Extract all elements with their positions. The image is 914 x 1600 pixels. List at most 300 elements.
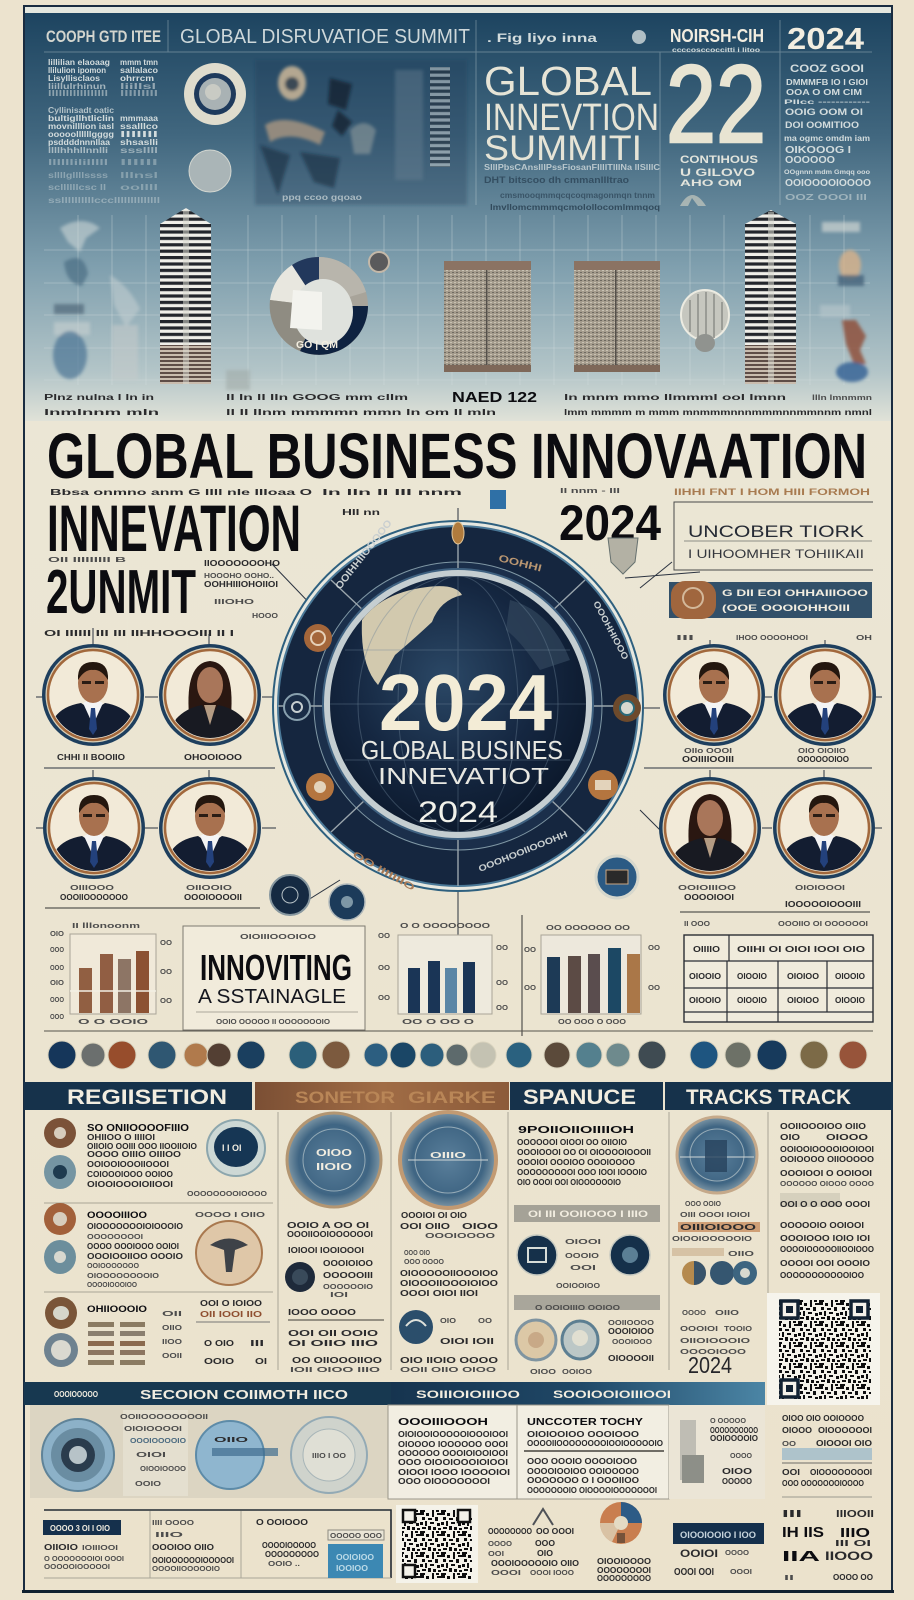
left text columns in banner: psddddnnnllaa [48,138,111,147]
section bar: sponsor: GIARKE [408,1088,496,1107]
bar chart 3: OO OOO O OOO [558,1019,627,1026]
speaker name labels row 2: OOOOIOOI [684,893,734,902]
icon: session disc 2 [400,1112,496,1208]
collage image [255,60,467,205]
globe emblem [273,518,643,893]
icon: pale orb [189,150,231,192]
text: tracks center: OIII OOOI IOIOI [680,1212,750,1219]
speaker name labels row 2: OIOIOOOI [795,885,845,892]
box: blue tile [328,1544,383,1578]
bar chart 3: OO OOOOOO OO [546,925,631,932]
text: ticket text: O OOIOOO [256,1518,308,1527]
text block: bottom mid: OOOOOOOO [488,1527,532,1536]
strip of small text under grid [44,389,872,417]
panel: far right text column: OOOIOOI O OOIOOI [780,1169,872,1178]
icon: dial bronze right bottom [588,770,618,800]
icon: dial right [613,694,641,722]
text: session column 1: OOOIIOOIOOOOOOI [287,1230,373,1239]
text: registration block 2: OIOOOOOOOOIO [87,1273,160,1280]
strip of small text under grid: ll ll llnm mmmmn mmn ln om ll mln [226,408,496,417]
bar chart 1: OO [160,998,173,1005]
sphere [322,568,594,840]
icon: registration teal 1 [44,1155,76,1189]
text block: logo caption [597,1557,651,1583]
portrait: speaker 7 [659,777,761,879]
section bar: sponsor spanuce: SPANUCE [523,1086,636,1109]
panel: agenda white card 2: OOOOOOOIO OIOOOOIOOOOOOOI [527,1486,657,1495]
small text above right portraits: OH [856,635,872,642]
subtitle innovation: INNEVATION [47,491,301,565]
icon: dial bronze left bottom [306,773,334,801]
text block: bottom right: IIIO [840,1525,870,1540]
small text under title: IIHHI FNT I HOM HIII FORMOH [674,487,870,497]
icon: registration brown 1 [44,1118,76,1148]
panel: agenda white card 2: UNCCOTER TOCHY [527,1417,643,1428]
strip of small text under grid: ll ln ll lln GOOG mm cllm [226,393,408,402]
speaker name labels row 1: OOIIIIOOIII [682,755,734,764]
right text column in banner: DMMMFB lO I GIOI [786,78,868,87]
left text columns in banner: llllllililllll [48,158,108,167]
bar chart 1: OO [160,940,173,947]
text: registration block 2: OOOIOOIIOO OOOIO [87,1252,183,1261]
panel: agenda white card 1: OOO OIOOOOOOOI [398,1477,490,1486]
icon: tracks small 3 [733,1261,757,1285]
panel: session discs [30,1405,388,1498]
speaker name labels row 2: IOOOOOIOOOIII [785,900,861,909]
icon: session small blue [399,1310,433,1344]
bar chart 2: OO [496,945,509,952]
icon: session disc large [42,1419,114,1491]
panel: agenda white card 1: OIOOI IOOO IOOOOIOI [398,1468,510,1477]
icon: bronze medallion [196,1221,262,1285]
panel: far right text column: OOOOIOOOOOIIOOIOOO [780,1245,874,1254]
outer dial ring: OOOHOOIIOOOHH [477,829,569,874]
text: ticket text: OOOIOO OIIO [152,1543,214,1552]
bar chart 1: OOO [50,1014,64,1021]
text: registration block 1: SO ONIIOOOOFIIIO [87,1123,189,1134]
text: session column 2: OOII OIIO OIOO [400,1367,497,1374]
panel: far right text column: OOOOOO OIOOO OOOO [780,1181,875,1188]
callout: innoviting: OIOIIIOOOIOO [240,934,317,941]
left text columns in banner: llllhhhllnnlli [48,146,108,155]
text: registration block 1: OOOOOOOOIOOOO [187,1191,268,1198]
text block: right agenda: OIOOOOOOI [818,1426,872,1435]
text: sponsor right [530,1320,655,1376]
section bar: sponsor spanuce [510,1082,663,1110]
panel: agenda white card 2: OOO OOOIO OOOOIOOO [527,1457,637,1466]
callout: innoviting: INNOVITING [200,947,352,988]
table panel [684,921,873,1022]
caption under 22: U GILOVO [680,167,756,179]
text: session column 1: OOIO A OO OI [287,1221,369,1230]
bar chart 2: OO [378,933,391,940]
text block: bottom mid: OOOIOOOOOIO OIIO [491,1559,579,1568]
left text columns in banner: bultigllhtliclin [48,114,114,123]
left text columns in banner: oollll [120,183,158,192]
icon: top gold pin [452,522,464,544]
text: registration block 1: COIOOOIOOO OOIOO [87,1170,173,1179]
section bar: session schedule: OOOIOOOOO [54,1390,98,1399]
text block: bottom mid: OO OOOI [536,1527,574,1536]
globe text: 2024 small: 2024 [418,796,498,829]
text: sponsor paragraph: OOOOOOOOOI OOO IOOI IOOOIO [517,1168,647,1177]
bottom frame rule [22,1590,894,1593]
outer dial ring: OOHHI [497,553,543,575]
text: ticket text: OOOOO OOO [330,1533,383,1540]
table panel right [574,261,660,372]
section bar: session schedule: SECOION COIIMOTH IICO [140,1387,348,1402]
text: sponsor paragraph: OIO OOOI OOI OIOOOOOOIO [517,1178,621,1187]
icon: dark node 2 [329,884,365,920]
text and table: registration block 3: OOI O IOIOO [200,1299,262,1308]
text: registration block 2: OOOO I OIIO [195,1212,266,1219]
text: session column 2: OOOI OIOI IIOI [400,1289,478,1298]
text block: under navy box: OOIOI [680,1548,718,1560]
portrait: speaker 2 [159,644,261,746]
bar chart 2: O O OOOOOOOO [400,923,491,930]
panel: agenda white card 2: OOOOIOOIOO OOIOOOOO [527,1467,639,1476]
text: sponsor center [556,1239,601,1290]
small text near summit: OOHHIIIOHOIIOI [204,580,278,589]
bar chart 3: OO [648,985,661,992]
left text columns in banner: ssalllco [120,122,158,131]
text: registration block 1: OHIIOO O IIIIOI [87,1133,155,1142]
small text near summit: HOOOHO OOHO.. [204,573,274,580]
text block: bottom mid: OOOI IOOO [530,1570,575,1577]
panel: agenda white card 2: OOOOIIOOOOOOOOIOOIOOOOOIO [527,1439,663,1448]
text block: logo caption: OOOOOOOOO [597,1574,651,1583]
text block: right agenda: OIOO OIO OOIOOOO [782,1414,864,1423]
bar chart 2: OO O OO O [402,1019,475,1026]
text block: right agenda: OIOOOI OIO [816,1439,872,1448]
icon: session disc medium: OIIO [214,1437,249,1444]
icon row [48,1040,867,1070]
speaker name labels row 2 [45,885,870,912]
table panel: OIIHI OI OIOI IOOI OIO [737,945,865,954]
text: tracks bottom: OOOO [682,1310,707,1317]
text: session disc caption: OOOIOOOOIO [130,1438,187,1445]
text block: bottom mid: OOOI [491,1570,521,1577]
bar chart tower left [160,208,211,384]
left text columns in banner: scllllllcsc ll [48,183,106,192]
text block: bottom right: OOOO OO [833,1573,873,1582]
text: session column 2: OO [478,1318,493,1325]
small text above right portraits [676,635,872,642]
portrait: speaker 5 [43,777,145,879]
text: ticket text: OOOOOOOOO [265,1550,319,1559]
right text column in banner: OOIOOOOIOOOO [785,178,871,189]
text and table: registration block 3: O OIO [204,1339,234,1348]
panel: agenda white card 1: OIOIOOIOOOOOIOOOIOOI [398,1430,508,1439]
text: sponsor paragraph: 9POIIOIIOIIIIOH [518,1125,634,1136]
text: session disc caption: OIOOIOOOO [140,1466,187,1473]
outer dial ring: OO IIIIIIIO [351,849,417,893]
left text columns in banner: llilulion ipomon [48,66,106,75]
small text above right portraits: III [676,635,694,642]
table panel: OIOOIO [737,996,767,1005]
small text near summit [44,557,280,638]
text: registration block 2: OOOOOOOOI [87,1234,143,1241]
text: sponsor right: OIOO [530,1369,557,1376]
small text under title: Bbsa onmno anm G IIll nIe IIIoaa O [50,488,312,497]
table panel: II OOO [684,921,711,928]
outer dial ring: OOIHHIIOOOOO [334,518,395,592]
icon: registration teal 2 [44,1240,76,1274]
icon: dial bronze left top [304,624,332,652]
left text columns in banner: liillsl [120,82,156,91]
bar chart 3: OO [524,947,537,954]
table panel: OOOIIO OI OOOOOOI [778,921,868,928]
right decorative icon column in grid [820,222,868,382]
text: ticket text: OOOOOIOOOOOI [44,1564,110,1571]
small text under title: ln lln ll III nnm [322,488,462,497]
text block: right agenda [782,1414,872,1497]
left text columns in banner: lllllllll [120,89,158,98]
globe text: global business: GLOBAL BUSINES [361,735,563,765]
text: ticket text: O OOOOOOOIOI OOOI [44,1556,124,1563]
header strip: summit title row: . Fig liyo inna [487,31,597,45]
text: registration block 1: OOOO OIIIO OIIIOO [87,1150,181,1159]
text: session column 1: OOOIOIOO [323,1259,373,1268]
icon: dark node 1 [270,875,310,915]
strip of small text under grid: llln lmnmmn [812,395,872,402]
text block: logo caption: OOOOOOOOI [597,1566,651,1575]
bar chart 1: O O OOIO [78,1019,149,1026]
caption under 22: AHO OM [680,178,742,188]
strip of small text under grid: lnmlnnm mln [44,408,159,417]
text: session column 2: OOOIOOOO [425,1233,496,1240]
bar chart 2: OO [496,980,509,987]
text and table: registration block 3: OOII [162,1353,182,1360]
small text under title: HII nn [342,508,380,517]
panel: session column 2 [399,1112,498,1374]
callout bar with bronze badge [669,581,872,619]
text: tracks bottom: OIIOIOOOIO [680,1338,751,1345]
icon: tracks small 2 [710,1261,734,1285]
bar chart 1: OIO [50,931,65,938]
text block: right agenda: OIOOOOOOOOI [810,1468,872,1477]
text and table: registration block 3: OOIO [204,1357,234,1366]
text: registration block 1: OIIOIO OOIII OOO IIOOIIOIO [87,1142,197,1151]
column rules [44,1112,768,1370]
text block: bottom right: IIIOOII [836,1509,874,1520]
section bar: registration [24,1082,252,1110]
icon: sponsor pale 2 [562,1321,598,1359]
divider line under charts [44,1030,873,1032]
left text columns in banner: lillilian elaoaag [48,58,110,67]
text: session disc caption: OOIO [135,1481,162,1488]
speaker name labels row 1: OIO OIOIIO [798,748,847,755]
text and table: registration block 3: OII IOOI IIO [200,1310,262,1319]
text: sponsor paragraph: OOOIOOOI OO OI OIOOOOIOOOII [517,1148,651,1157]
icon: blue node [596,856,638,898]
heading: global innovation summit: SUMMITI [484,129,642,168]
collage image: ppq ccoo gqoao [282,193,362,202]
left text columns in banner: sallalaco [120,66,158,75]
portrait: speaker 6 [159,777,261,879]
text block: under navy box: OOOO [725,1550,750,1557]
table panel: OIIIIO [693,945,720,954]
text: sponsor center: OOI [570,1265,596,1272]
bar chart 3: OO [524,985,537,992]
text block: bottom right [782,1509,874,1582]
text block: bottom mid: OIO [537,1549,553,1558]
text block: under navy box [674,1548,752,1578]
text: tracks bottom: TOOIO [724,1326,753,1333]
bar chart 1: OIO [50,980,65,987]
table panel: OIOOIO [835,996,865,1005]
table panel: OIOOIO [835,972,865,981]
bar chart 2 [378,923,509,1026]
icon: sponsor dark 1 [517,1235,557,1275]
strip of small text under grid: NAED 122 [452,389,537,406]
right text column in banner: OOOOOO [785,155,835,166]
text: session disc caption: OIOI [136,1452,166,1459]
label: navy tag [43,1520,121,1535]
callout bar with bronze badge: (OOE OOOIOHHOIII [722,603,850,613]
right text column in banner: COOZ GOOI [790,63,864,75]
left text columns in banner: ohrrcm [120,74,154,83]
banner caption text: cmsmooqmmqcqcoqmagonmqn tnnm [500,191,655,200]
small text near summit: IIOOOOOOOHO [204,559,280,568]
text: ticket text: OOOOIIOOOOOIO [152,1566,221,1573]
small text near summit: OI IIIIII III III IIHHOOOIII II I [44,629,234,638]
connector lines [36,508,882,935]
left text columns in banner: movnilllion iasl [48,122,114,131]
text and table: registration block 3: OIIO [162,1325,183,1332]
callout box: forum [674,502,873,570]
icon: session disc pale [291,1417,367,1493]
header strip: summit title row: ccccosccoccitti i litoo [672,48,760,54]
panel: far right text column [780,1122,875,1280]
speaker name labels row 1: CHHI II BOOIIO [57,753,125,762]
icon: balloon [681,290,729,352]
speaker name labels row 2: OOOIOOOOII [184,893,242,902]
table panel: OIOOIO [737,972,767,981]
header strip: summit title row [46,21,865,56]
icon: sponsor dark 2 [610,1235,650,1275]
text: session column 2 [400,1211,498,1374]
text: registration block 1: OIOOIOOOIOIIOOI [87,1180,173,1189]
text: session column 1: IOIOOI IOOIOOOI [288,1246,364,1255]
callout: innoviting [183,926,365,1030]
caption under 22: CONTIHOUS [680,154,758,166]
text: session column 1 [287,1221,384,1374]
panel: pale info card: OOOOO [722,1477,752,1486]
text: session column 2: OIOOOIIOOOIOIOO [400,1279,498,1288]
panel: far right text column: OOIIOOOIOO OIIO [780,1122,866,1131]
panel: agenda white card 1 [388,1405,517,1499]
icon: small medallion [369,252,389,272]
text and table: registration block 3: OHIIOOOIO [87,1304,147,1314]
text: ticket text: IIIO [155,1532,184,1539]
text and table: registration block 3: OII [162,1311,182,1318]
speaker name labels row 1: OOOOOOIOO [797,755,849,764]
text: tracks center: OOO OOIO [685,1201,722,1208]
text: session column 1: IOII OIOO IIIO [290,1367,381,1374]
icon: session disc medium [196,1421,278,1489]
text: sponsor right: OIOOOOII [608,1354,654,1363]
text and table: registration block 3 [87,1299,270,1366]
small text under title: II nnm - III [560,488,620,495]
panel: pale info card [669,1405,765,1499]
outer dial ring: OOOHHIOOO [591,599,631,661]
right text column in banner: OOIG OOM Ol [785,107,863,117]
bar chart 1: OOO [50,965,64,972]
panel: far right text column: OOIOOIOOOOIOOIOOI [780,1145,874,1154]
banner: grey sponsor strip 2: O OOIOIIIO OOIOO [535,1305,621,1312]
left text columns in banner: liillulrhinun [48,82,106,91]
right text column in banner [784,63,871,202]
hero panel: dark blue summit banner [25,7,891,421]
left text columns in banner: sssllll [120,146,158,155]
text: tracks bottom: OOOIOI [680,1326,718,1333]
pie chart [270,257,368,355]
icon: QR code large [767,1293,880,1405]
strip of small text under grid: lmm mmmm m mmm mnmmmnnnmmmnnmmnnm nmnl [564,408,872,417]
banner caption text: SlllPbsCAnslllPssFiosanFIlllTlllNa llSlllC [484,163,660,172]
text: session column 2: OIOO [462,1222,498,1231]
speaker name labels row 1 [57,748,849,764]
panel: far right text column: OOOOOOOOOOOIOO [780,1271,864,1280]
bar chart tower right [745,210,796,384]
text block: bottom mid: OOOO [488,1541,513,1548]
icon: target ring [184,63,246,125]
text: session disc caption: OOIIOOOOOOOOII [120,1414,208,1421]
panel: agenda white card 2 [517,1405,669,1499]
table panel left [444,261,531,372]
icon: small vase above dial [608,538,638,574]
text: sponsor center: OOOIO [565,1253,600,1260]
small text under title [50,487,870,517]
text: sponsor right: OOOIOOO [612,1339,653,1346]
text: tracks center [672,1201,760,1258]
speaker name labels row 1: OHOOIOOO [184,753,242,762]
panel: bottom ticket strip [43,1510,391,1578]
panel: far right text column: OOOOOIO OOIOOI [780,1221,864,1230]
speaker name labels row 2: OIIOOIO [186,885,233,892]
year 2024: 2024 [559,495,661,551]
text: registration block 2 [87,1210,266,1289]
header strip: summit title row: COOPH GTD ITEE [46,27,161,46]
text: tracks center: OIOOIOOOOOIO [672,1236,753,1243]
pie chart: GO | QM [296,340,338,351]
bar chart 1: OOO [50,997,64,1004]
text block: bottom right: II [784,1575,794,1582]
section bar: sponsor [255,1082,509,1110]
bar chart 1: OOO [50,947,64,954]
left decorative icon column in grid [53,221,250,390]
text: sponsor right: OOIIOOOO [608,1320,655,1327]
text: session disc caption: OIOIOOOOI [124,1426,182,1433]
section bar: registration: REGIISETION [67,1086,227,1109]
table panel: OIOIOO [787,996,819,1005]
section bar: session schedule: SOIIIOIOIIIOO [416,1389,521,1401]
icon: session disc pale: IIIO I OO [312,1453,347,1460]
text: sponsor right: OOIOO [562,1369,593,1376]
left text columns in banner: Lisyllisclaos [48,74,101,83]
icon: session disc 2: OIIIO [430,1151,466,1160]
text: session column 2: OIOI IOII [440,1337,494,1346]
text: session column 2: OOOIOI OI OIO [401,1211,467,1220]
right text column in banner: ma ogmc omdm iam [784,134,870,143]
left text columns in banner: mmmaaa [120,114,159,123]
text: session column 2: OOO OOOO [404,1259,445,1266]
box: blue tile: IOOIOO [336,1564,368,1573]
icon: registration brown 3 [45,1297,77,1329]
label: navy registration box: OIOOIOOIO I IOO [680,1530,756,1540]
label: navy tag: OOOO 3 OI I OIO [50,1524,110,1533]
